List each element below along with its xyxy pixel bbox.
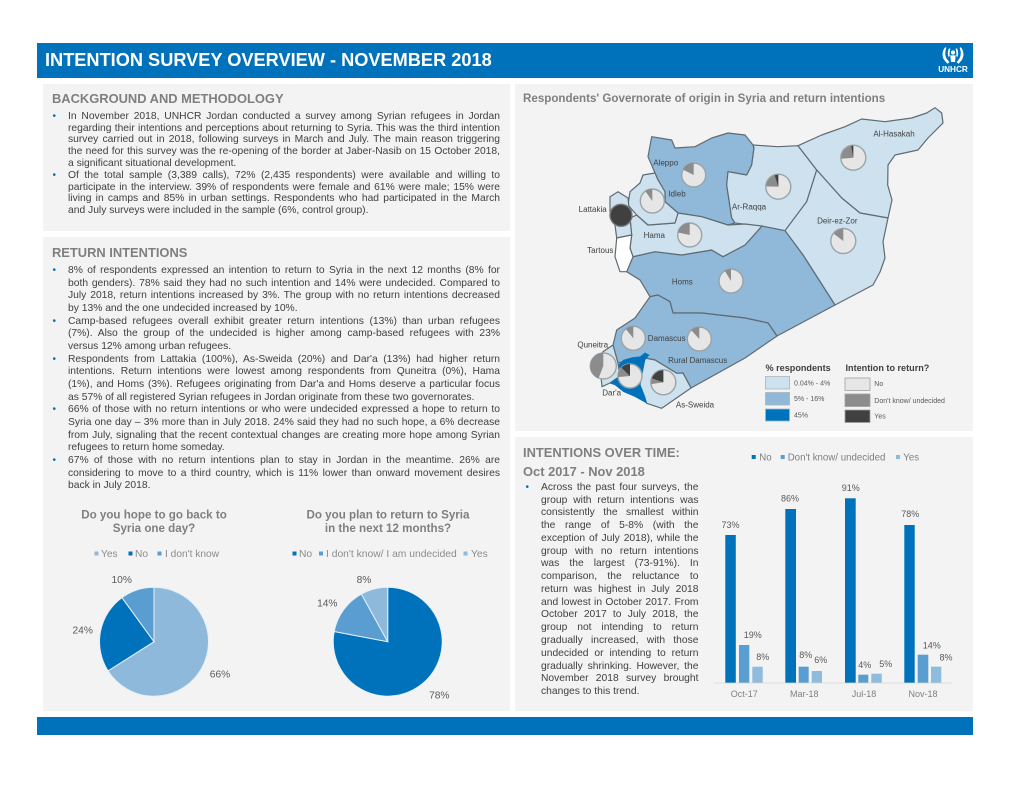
- bar chart legend: Don't know/ undecided: [788, 452, 885, 463]
- text block: background bullets: [52, 111, 500, 216]
- pie title: Syria one day?: [113, 522, 195, 535]
- legend: percent respondents: 0.04% - 4%: [794, 380, 830, 388]
- text block: background bullets: survey carried out in 2018, following surveys in March and July. The main reason triggering: [68, 134, 500, 145]
- governorate labels: Lattakia: [579, 205, 607, 214]
- legend: percent respondents: [766, 363, 831, 421]
- pie: Al-Hasakah: [841, 145, 866, 170]
- text block: intentions over time: and lowest in October 2017. From: [541, 597, 698, 608]
- panel: return intentions: [43, 237, 510, 711]
- text block: intentions over time: November 2018 survey brought: [541, 673, 698, 684]
- text: •: [52, 111, 56, 122]
- pie value labels: 66%: [210, 670, 230, 681]
- text block: return intentions bullets: July 2018, return intentions increased by 3%. The group with no return intentions decreased: [68, 290, 500, 301]
- text block: background bullets: participate in the interview. 39% of respondents were female and 61% were male; 15% were: [68, 182, 500, 193]
- map: Syria governorates: [577, 107, 945, 423]
- governorate labels: Dar'a: [602, 388, 622, 397]
- text block: background bullets: a significant situational development.: [68, 158, 236, 169]
- text block: background bullets: living in camps and 85% in urban settings. Respondents who had participated in the March: [68, 193, 500, 204]
- icon: UNHCR logo: UNHCR: [938, 65, 968, 74]
- governorate labels: Quneitra: [577, 341, 609, 350]
- text block: return intentions bullets: 8% of respondents expressed an intention to return to Syria in the next 12 months (8% for: [68, 265, 500, 276]
- text block: return intentions bullets: Respondents from Lattakia (100%), As-Sweida (20%) and Dar'a (13%) had higher return: [68, 354, 500, 365]
- text: •: [526, 482, 529, 493]
- bar value labels: 86%: [781, 493, 799, 503]
- text block: intentions over time: gradually increased, with those: [541, 635, 698, 646]
- pie legend: No: [135, 549, 148, 560]
- bar value labels: 6%: [814, 655, 827, 665]
- text block: intentions over time: was the largest (73-91%). In: [541, 558, 698, 569]
- bar value labels: 8%: [939, 653, 953, 663]
- pie slices: [333, 587, 442, 696]
- text block: background bullets: Of the total sample (3,389 calls), 72% (2,435 respondents) were available and willing to: [68, 170, 500, 181]
- bar chart legend: Yes: [903, 452, 919, 463]
- pie: Damascus: [621, 326, 645, 350]
- text block: background bullets: and July surveys were included in the sample (6%, control group).: [68, 205, 368, 216]
- pie value labels: 8%: [357, 575, 371, 586]
- text block: intentions over time: Across the past four surveys, the: [541, 482, 698, 493]
- bar chart legend: [752, 452, 919, 463]
- pie: Quneitra: [590, 353, 616, 379]
- pie: Idleb: [640, 189, 664, 213]
- text block: intentions over time: undecided or intending to return: [541, 648, 698, 659]
- bar value labels: 73%: [721, 520, 740, 530]
- bar value labels: 5%: [879, 659, 892, 669]
- text block: intentions over time: return was highest in July 2018: [541, 584, 698, 595]
- text: •: [52, 170, 56, 181]
- bar value labels: 4%: [858, 660, 871, 670]
- heading: return intentions: RETURN INTENTIONS: [52, 245, 187, 260]
- title: INTENTION SURVEY OVERVIEW - NOVEMBER 2018: [45, 50, 492, 70]
- bars: [725, 498, 941, 683]
- legend: intention to return: Don't know/ undecided: [874, 398, 945, 405]
- governorate labels: Tartous: [587, 246, 613, 255]
- text block: return intentions bullets: versus 12% among urban refugees.: [68, 341, 231, 352]
- text block: return intentions bullets: [52, 265, 500, 491]
- text block: return intentions bullets: from July, signaling that the recent contextual changes are creating more hope among Syrian: [68, 430, 500, 441]
- governorate labels: Homs: [672, 277, 693, 286]
- text block: return intentions bullets: back in July 2018.: [68, 480, 150, 491]
- pie: Hama: [678, 223, 702, 247]
- bar value labels: 78%: [901, 509, 919, 519]
- legend: intention to return: No: [874, 381, 883, 388]
- header banner: [37, 43, 973, 78]
- governorate labels: [577, 130, 915, 409]
- text block: intentions over time: gradually shrinking. However, the: [541, 661, 698, 672]
- governorate labels: As-Sweida: [676, 400, 715, 409]
- pie: Ar-Raqqa: [766, 174, 791, 199]
- text: •: [52, 265, 56, 276]
- text block: intentions over time: changes to this trend.: [541, 686, 639, 697]
- pie title: Do you hope to go back to: [81, 508, 227, 521]
- text: •: [52, 316, 56, 327]
- pie legend: [94, 549, 220, 560]
- legend: percent respondents: 45%: [794, 412, 808, 420]
- icon: UNHCR logo: [938, 47, 968, 74]
- pie value labels: 14%: [317, 598, 337, 609]
- governorate labels: Idleb: [668, 190, 686, 199]
- heading: date range: Oct 2017 - Nov 2018: [523, 464, 645, 478]
- chart: pie hope to go back: [73, 508, 230, 696]
- heading: intentions over time: INTENTIONS OVER TIME:: [523, 445, 680, 460]
- pie: Deir-ez-Zor: [831, 228, 856, 254]
- heading: map title: Respondents' Governorate of origin in Syria and return intentions: [523, 92, 885, 105]
- governorate labels: Deir-ez-Zor: [817, 216, 858, 225]
- pie legend: I don't know/ I am undecided: [326, 549, 457, 560]
- chart: pie plan to return: [292, 508, 488, 702]
- pie title: [307, 508, 470, 535]
- pie title: Do you plan to return to Syria: [307, 508, 470, 521]
- pie legend: Yes: [471, 549, 488, 560]
- governorate polygons: [592, 108, 943, 408]
- text block: intentions over time: [526, 482, 698, 697]
- pie value labels: 10%: [112, 575, 132, 586]
- text: •: [52, 404, 56, 415]
- pie: As-Sweida: [651, 370, 676, 395]
- heading: background and methodology: BACKGROUND AND METHODOLOGY: [52, 91, 284, 106]
- return intention pies: [590, 145, 866, 395]
- text block: return intentions bullets: Syria one day – 3% more than in July 2018. 24% said they had no such hope, a 6% decrease: [68, 417, 500, 428]
- text block: background bullets: regarding their intentions and perceptions about returning to Syria. This was the third intention: [68, 123, 500, 134]
- panel: map: [515, 84, 973, 431]
- bar value labels: 14%: [923, 641, 941, 651]
- governorate labels: Rural Damascus: [668, 356, 727, 365]
- chart: bar chart intentions over time: [714, 452, 953, 699]
- legend: percent respondents: 5% - 16%: [794, 396, 824, 403]
- text block: return intentions bullets: as 57% of all registered Syrian refugees in Jordan originate from these two governorates.: [68, 392, 474, 403]
- pie: Lattakia: [610, 204, 632, 226]
- pie: Rural Damascus: [687, 327, 711, 351]
- text block: return intentions bullets: (1%), and Homs (3%). Refugees originating from Dar'a and Homs deserve a particular focus: [68, 379, 500, 390]
- bar chart legend: No: [759, 452, 772, 463]
- bar category labels: Oct-17: [731, 689, 758, 699]
- text block: intentions over time: group with return intentions was: [541, 495, 698, 506]
- text block: return intentions bullets: refugees to return home someday.: [68, 442, 225, 453]
- pie: Dar'a: [618, 364, 642, 388]
- legend: percent respondents: % respondents: [766, 363, 831, 373]
- text block: intentions over time: group with no return intentions: [541, 546, 698, 557]
- text block: intentions over time: consistently the smallest within: [541, 507, 698, 518]
- text block: background bullets: the need for this survey was the re-opening of the border at Jaber-Nasib on 15 October 2018,: [68, 146, 500, 157]
- pie slices: [100, 587, 209, 696]
- bar category labels: Nov-18: [908, 689, 938, 699]
- pie value labels: [73, 575, 230, 681]
- text: •: [52, 455, 56, 466]
- text block: background bullets: In November 2018, UNHCR Jordan conducted a survey among Syrian refugees in Jordan: [68, 111, 500, 122]
- text block: intentions over time: comparison, the reluctance to: [541, 571, 698, 582]
- bar category labels: [731, 689, 938, 699]
- governorate labels: Hama: [644, 231, 666, 240]
- text block: return intentions bullets: (7%). Also the group of the undecided is higher among camp-based refugees with 23%: [68, 328, 500, 339]
- text block: return intentions bullets: intentions. Return intentions were lowest among respondents from Quneitra (0%), Hama: [68, 366, 500, 377]
- pie legend: [292, 549, 488, 560]
- pie: Aleppo: [682, 163, 706, 187]
- text block: return intentions bullets: 67% of those with no return intentions plan to stay in Jordan in the meantime. 26% are: [68, 455, 500, 466]
- legend: intention to return: Yes: [874, 414, 886, 420]
- bar value labels: 19%: [744, 630, 762, 640]
- bar value labels: 8%: [799, 650, 812, 660]
- governorate labels: Damascus: [648, 334, 686, 343]
- pie legend: Yes: [101, 549, 118, 560]
- governorate labels: Aleppo: [653, 158, 679, 167]
- text block: intentions over time: October 2017 to July 2018, the: [541, 609, 698, 620]
- governorate labels: Al-Hasakah: [873, 130, 915, 139]
- pie legend: No: [299, 549, 312, 560]
- text: •: [52, 354, 56, 365]
- footer band: [37, 717, 973, 734]
- pie value labels: 78%: [429, 691, 449, 702]
- bar value labels: 91%: [842, 483, 860, 493]
- governorate labels: Ar-Raqqa: [732, 203, 767, 212]
- bar value labels: 8%: [756, 652, 769, 662]
- text block: return intentions bullets: 66% of those with no return intentions or who were undecided expressed a hope to return to: [68, 404, 500, 415]
- text block: intentions over time: group not intending to return: [541, 622, 698, 633]
- text block: return intentions bullets: considering to move to a third country, which is 11% lower than onward movement desires: [68, 468, 500, 478]
- text block: return intentions bullets: by 13% and the one undecided increased by 10%.: [68, 303, 298, 314]
- pie title: [81, 508, 227, 535]
- bar category labels: Mar-18: [790, 689, 819, 699]
- text block: intentions over time: the range of 5-8% (with the: [541, 520, 698, 531]
- text block: intentions over time: exception of July 2018), while the: [541, 533, 698, 544]
- pie value labels: [317, 575, 449, 702]
- pie title: in the next 12 months?: [325, 522, 451, 535]
- legend: intention to return: [845, 363, 945, 422]
- bar value labels: [721, 483, 953, 670]
- pie: Homs: [719, 269, 743, 293]
- text block: return intentions bullets: both genders). 78% said they had no such intention and 14% were undecided. Compared to: [68, 278, 500, 289]
- panel: background and methodology: [43, 84, 510, 231]
- text block: return intentions bullets: Camp-based refugees overall exhibit greater return intentions (13%) than urban refugees: [68, 316, 500, 327]
- bar category labels: Jul-18: [852, 689, 876, 699]
- panel: intentions over time: [515, 437, 973, 711]
- legend: intention to return: Intention to return?: [846, 363, 930, 373]
- pie legend: I don't know: [165, 549, 220, 560]
- pie value labels: 24%: [73, 626, 93, 637]
